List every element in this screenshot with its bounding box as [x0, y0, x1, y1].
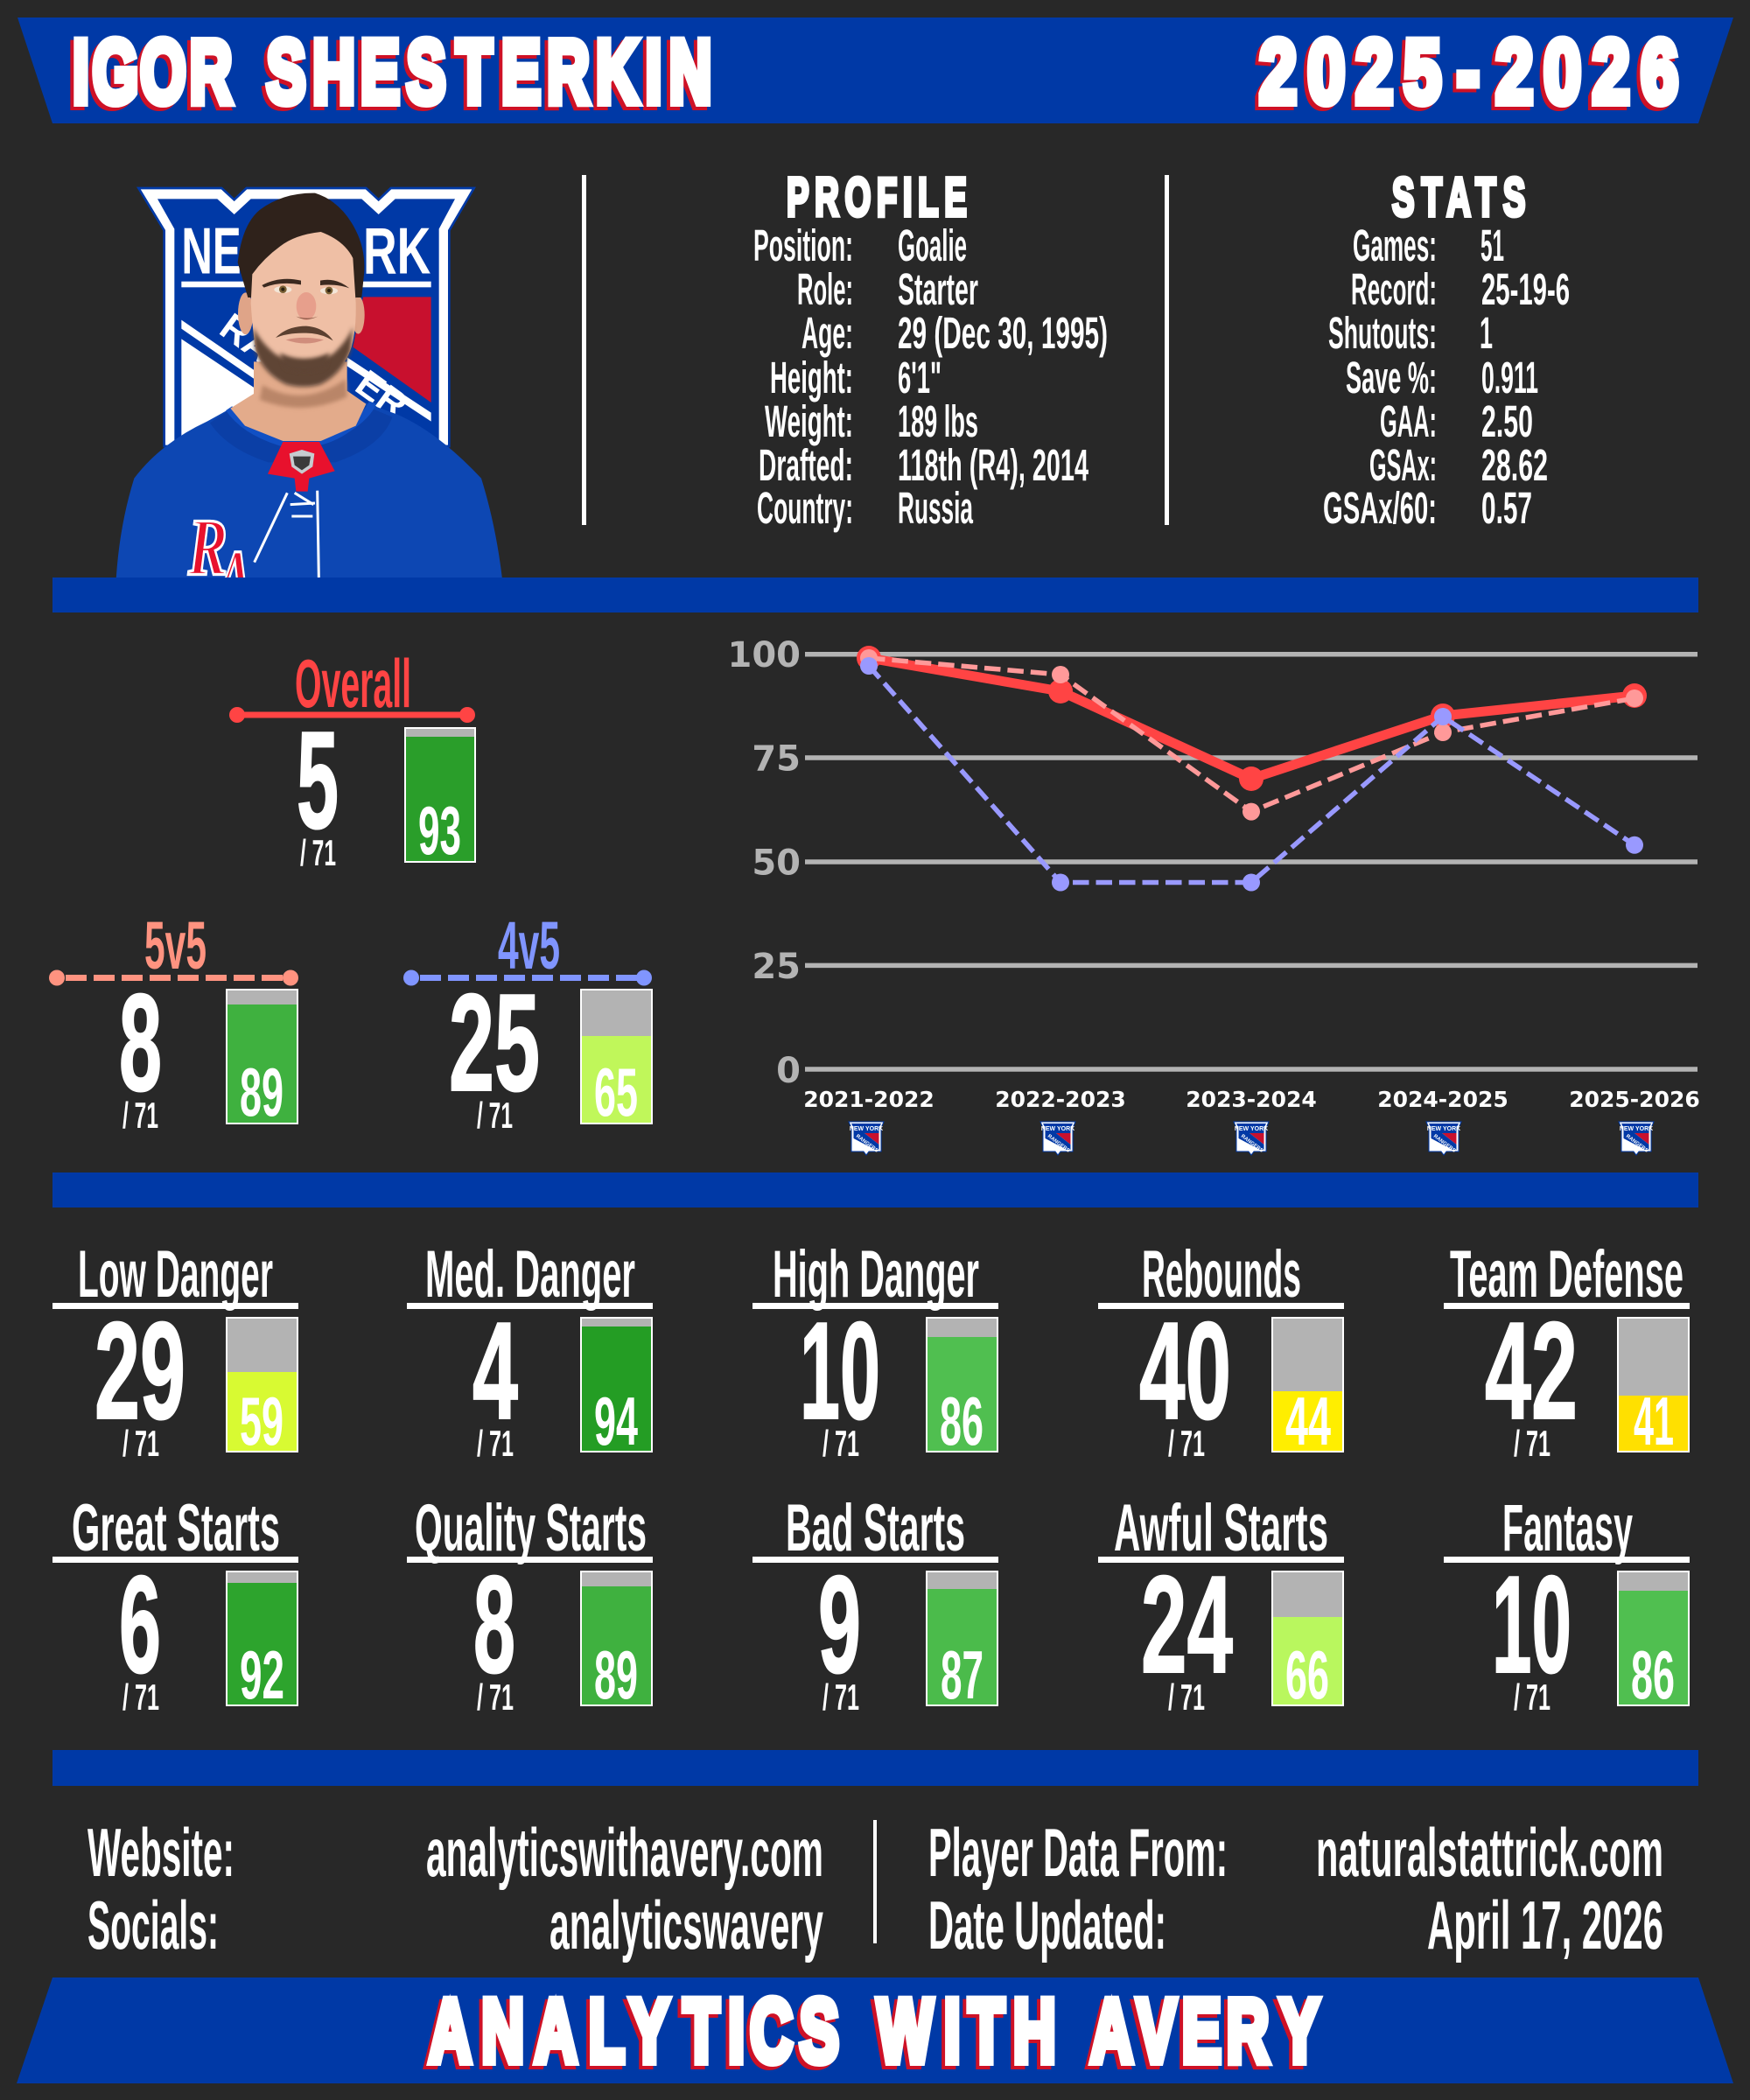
- brand title: ANALYTICS WITH AVERY: [429, 1982, 1320, 2081]
- stats values: [1480, 220, 1570, 533]
- card: Bad Starts: Bad Starts: [786, 1491, 965, 1565]
- overall percentile bar: 93: [418, 792, 461, 869]
- card: High Danger: [752, 1237, 998, 1464]
- card: Med. Danger: Med. Danger: [425, 1237, 635, 1312]
- card: Rebounds: / 71: [1168, 1423, 1205, 1464]
- icon: team logo 2021-2022: [849, 1122, 884, 1155]
- card: Team Defense: 41: [1634, 1382, 1674, 1460]
- stats labels: Save %:: [1346, 353, 1437, 402]
- card: Fantasy: 10: [1492, 1548, 1572, 1702]
- profile values: 6'1": [898, 353, 942, 402]
- card: Team Defense: [1444, 1237, 1690, 1464]
- stats labels: Shutouts:: [1328, 308, 1437, 358]
- footer divider: [873, 1820, 877, 1943]
- y axis labels: [728, 635, 801, 1091]
- card: Low Danger: / 71: [122, 1423, 159, 1464]
- 4v5 percentile bar: [580, 989, 653, 1130]
- card: High Danger: / 71: [822, 1423, 859, 1464]
- divider bar 2: [52, 1172, 1698, 1208]
- card: Rebounds: Rebounds: [1142, 1237, 1301, 1312]
- card: Great Starts: 92: [240, 1636, 284, 1713]
- profile labels: Drafted:: [759, 440, 853, 490]
- team logo shield: [138, 188, 474, 446]
- card: Rebounds: 44: [1285, 1382, 1331, 1460]
- card: High Danger: High Danger: [773, 1237, 979, 1312]
- 4v5 percentile bar: 65: [594, 1054, 638, 1130]
- profile values: Starter: [898, 264, 978, 314]
- card: Quality Starts: Quality Starts: [415, 1491, 647, 1565]
- 4v5 rank: 25: [449, 966, 540, 1120]
- stats values: 25-19-6: [1481, 264, 1570, 314]
- stats values: 2.50: [1481, 396, 1533, 446]
- icon: team logo 2024-2025: RANGERS: [1432, 1134, 1456, 1154]
- team logo shield: RA: [212, 305, 281, 372]
- icon: team logo 2022-2023: NEW YORK: [1041, 1126, 1074, 1132]
- card: Bad Starts: / 71: [822, 1676, 859, 1718]
- profile labels: Position:: [753, 220, 853, 270]
- icon: team logo 2023-2024: [1234, 1122, 1269, 1155]
- overall percentile bar: [404, 727, 476, 869]
- team logo shield: NE: [181, 214, 242, 288]
- y axis labels: 25: [752, 947, 801, 987]
- footer credits left: Socials:: [88, 1886, 219, 1964]
- card: Awful Starts: 66: [1285, 1636, 1329, 1713]
- footer credits right: [928, 1814, 1663, 1964]
- card: Rebounds: [1098, 1237, 1344, 1464]
- vertical divider right: [1165, 175, 1169, 525]
- icon: team logo 2021-2022: RANGERS: [855, 1134, 878, 1154]
- profile labels: Country:: [757, 483, 853, 533]
- card: Low Danger: 29: [94, 1294, 186, 1448]
- 5v5 percentile bar: [226, 989, 298, 1130]
- stats heading: STATS: [1392, 166, 1525, 228]
- icon: team logo 2025-2026: NEW YORK: [1620, 1126, 1653, 1132]
- icon: team logo 2025-2026: RANGERS: [1625, 1134, 1648, 1154]
- icon: team logo 2024-2025: NEW YORK: [1427, 1126, 1460, 1132]
- stats values: 0.911: [1481, 353, 1538, 402]
- line chart: rating history: [728, 635, 1700, 1155]
- footer credits left: analyticswavery: [550, 1886, 823, 1964]
- footer credits left: [88, 1814, 823, 1964]
- icon: team logo 2021-2022: NEW YORK: [850, 1126, 883, 1132]
- card: Fantasy: [1444, 1491, 1690, 1718]
- stats labels: Record:: [1351, 264, 1437, 314]
- footer credits left: analyticswithavery.com: [426, 1814, 823, 1891]
- card: High Danger: 86: [940, 1382, 984, 1460]
- card: Bad Starts: 87: [941, 1636, 984, 1713]
- profile values: 118th (R4), 2014: [898, 440, 1088, 490]
- card: Med. Danger: 94: [594, 1382, 638, 1460]
- card: Med. Danger: [407, 1237, 653, 1464]
- profile labels: Height:: [770, 353, 853, 402]
- jersey: R: [187, 503, 228, 593]
- panel: profile: [753, 166, 1108, 533]
- panel: stats: GAA:: [1380, 396, 1437, 446]
- panel: stats: GSAx:: [1369, 440, 1437, 490]
- profile values: 189 lbs: [898, 396, 978, 446]
- team logo shield: ER: [347, 362, 415, 427]
- card: Great Starts: 6: [119, 1548, 161, 1702]
- top banner: [18, 18, 1733, 125]
- overall line key: [229, 707, 475, 723]
- stats values: 28.62: [1481, 440, 1548, 490]
- season title: 2025-2026: [1259, 22, 1678, 122]
- 5v5 rank: 8: [119, 966, 162, 1120]
- jersey: [116, 402, 502, 625]
- card: Rebounds: 40: [1139, 1294, 1231, 1448]
- stats labels: GSAx/60:: [1323, 483, 1437, 533]
- card: Bad Starts: [752, 1491, 998, 1718]
- y axis labels: 50: [752, 844, 801, 884]
- 5v5 line key: [49, 970, 298, 985]
- overall heading: Overall: [295, 645, 411, 722]
- icon: team logo 2022-2023: [1040, 1122, 1075, 1155]
- season title: 2025-2026: [1256, 25, 1675, 126]
- 5v5 heading: 5v5: [144, 908, 206, 984]
- footer credits right: Date Updated:: [928, 1886, 1166, 1964]
- card: Quality Starts: [407, 1491, 653, 1718]
- icon: team logo 2024-2025: [1426, 1122, 1461, 1155]
- 4v5 line key: [403, 970, 652, 985]
- y axis labels: 0: [776, 1051, 801, 1091]
- card: Great Starts: / 71: [122, 1676, 159, 1718]
- card: Low Danger: Low Danger: [78, 1237, 273, 1312]
- card: Team Defense: / 71: [1514, 1423, 1550, 1464]
- x axis season labels: 2021-2022: [803, 1087, 934, 1112]
- brand title: ANALYTICS WITH AVERY: [425, 1985, 1316, 2084]
- profile values: Goalie: [898, 220, 967, 270]
- bottom banner: [17, 1978, 1733, 2084]
- player photo over team logo: [116, 188, 502, 625]
- stats labels: Games:: [1353, 220, 1437, 270]
- y axis labels: 75: [752, 738, 801, 779]
- footer credits right: Player Data From:: [928, 1814, 1228, 1891]
- divider bar 3: [52, 1750, 1698, 1786]
- team logo shield: RK: [363, 214, 430, 288]
- card: High Danger: 10: [800, 1294, 880, 1448]
- 4v5 series: [860, 657, 1643, 891]
- x axis season labels: 2024-2025: [1377, 1087, 1508, 1112]
- card: Quality Starts: / 71: [477, 1676, 514, 1718]
- card: Fantasy: 86: [1631, 1636, 1675, 1713]
- overall series: [857, 646, 1647, 791]
- icon: team logo 2022-2023: RANGERS: [1046, 1134, 1070, 1154]
- 4v5 rank total: / 71: [477, 1095, 513, 1136]
- 5v5 series: [860, 649, 1643, 821]
- vertical divider left: [582, 175, 586, 525]
- y axis labels: 100: [728, 635, 801, 676]
- profile values: 29 (Dec 30, 1995): [898, 308, 1108, 358]
- card: Bad Starts: 9: [818, 1548, 861, 1702]
- card: Med. Danger: 4: [472, 1294, 518, 1448]
- card: Fantasy: Fantasy: [1502, 1491, 1633, 1565]
- x axis season labels: 2023-2024: [1186, 1087, 1317, 1112]
- player name title: IGOR SHESTERKIN: [73, 23, 711, 122]
- profile labels: Age:: [802, 308, 853, 358]
- card: Great Starts: [52, 1491, 298, 1718]
- rating: 5v5: [49, 908, 298, 1136]
- card: Low Danger: [52, 1237, 298, 1464]
- card: Awful Starts: [1098, 1491, 1344, 1718]
- stats values: 0.57: [1481, 483, 1532, 533]
- jersey: A: [214, 535, 252, 625]
- divider bar 1: [52, 578, 1698, 612]
- rating: overall: [229, 645, 476, 873]
- panel: stats: [1323, 166, 1570, 533]
- stats values: 1: [1480, 308, 1493, 358]
- profile heading: PROFILE: [787, 166, 967, 228]
- 5v5 rank total: / 71: [122, 1095, 158, 1136]
- profile labels: Weight:: [765, 396, 853, 446]
- card: Fantasy: / 71: [1514, 1676, 1550, 1718]
- profile values: [898, 220, 1108, 533]
- stats values: 51: [1480, 220, 1504, 270]
- card: Team Defense: 42: [1485, 1294, 1578, 1448]
- x axis season labels: [803, 1087, 1700, 1112]
- overall rank total: / 71: [300, 832, 336, 873]
- card: Awful Starts: 24: [1141, 1548, 1233, 1702]
- profile labels: Role:: [797, 264, 853, 314]
- player name title: IGOR SHESTERKIN: [69, 26, 708, 125]
- card: Low Danger: 59: [240, 1382, 284, 1460]
- rating: 4v5: [403, 908, 653, 1136]
- card: Awful Starts: Awful Starts: [1114, 1491, 1328, 1565]
- card: Quality Starts: 89: [594, 1636, 638, 1713]
- 4v5 heading: 4v5: [498, 908, 560, 984]
- overall rank: 5: [297, 704, 339, 858]
- footer credits left: Website:: [88, 1814, 234, 1891]
- card: Quality Starts: 8: [473, 1548, 515, 1702]
- card: Great Starts: Great Starts: [72, 1491, 280, 1565]
- profile values: Russia: [898, 483, 973, 533]
- icon: team logo 2023-2024: NEW YORK: [1235, 1126, 1268, 1132]
- card: Med. Danger: / 71: [477, 1423, 514, 1464]
- icon: team logo 2025-2026: [1619, 1122, 1654, 1155]
- profile labels: [753, 220, 853, 533]
- 5v5 percentile bar: 89: [240, 1054, 284, 1130]
- head: [230, 193, 366, 441]
- card: Awful Starts: / 71: [1168, 1676, 1205, 1718]
- icon: team logo 2023-2024: RANGERS: [1240, 1134, 1264, 1154]
- x axis season labels: 2022-2023: [995, 1087, 1126, 1112]
- stats labels: [1323, 220, 1437, 533]
- x axis season labels: 2025-2026: [1569, 1087, 1700, 1112]
